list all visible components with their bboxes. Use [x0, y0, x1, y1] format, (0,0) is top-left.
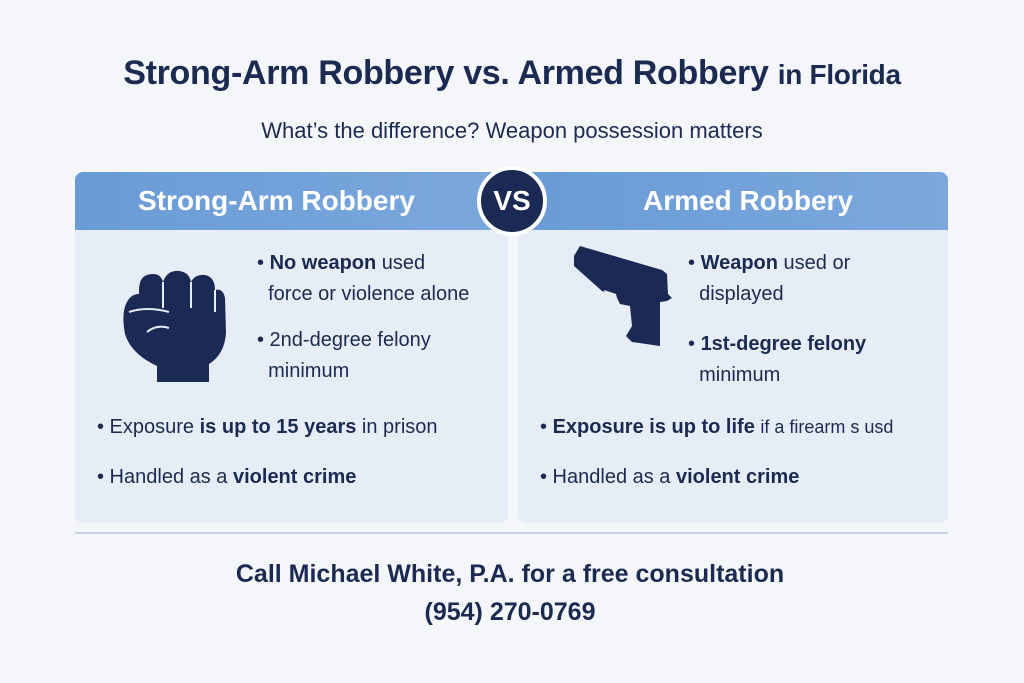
header: armed — [518, 172, 948, 230]
panel: armed: • 1st-degree felony — [688, 333, 866, 355]
panel: strong-arm: • Handled as a violent crime — [97, 466, 356, 488]
bullets: strong-arm: force or violence alone — [268, 283, 469, 305]
panel: strong-arm: • Exposure is up to 15 years in prison — [97, 416, 438, 438]
subtitle: What’s the difference? Weapon possession matters — [261, 118, 763, 143]
panel: strong-arm: • 2nd-degree felony — [257, 329, 431, 351]
panel: armed: • Exposure is up to life if a firearm s usd — [540, 416, 893, 438]
bullets: armed: • Weapon used or — [688, 252, 850, 274]
bullets: strong-arm: • No weapon used — [257, 252, 425, 274]
call to action — [236, 560, 784, 626]
bullets: armed: displayed — [699, 283, 784, 305]
icon: gun — [574, 246, 672, 346]
panel: strong-arm: minimum — [268, 360, 349, 382]
title: Strong-Arm Robbery vs. Armed Robbery in Florida — [123, 54, 901, 92]
panel: strong-arm — [75, 172, 508, 523]
panel: armed: minimum — [699, 364, 780, 386]
icon: fist — [123, 270, 226, 382]
header: armed: Armed Robbery — [643, 185, 853, 216]
vs badge: VS — [493, 185, 531, 216]
call to action: Call Michael White, P.A. for a free consultation — [236, 560, 784, 588]
vs badge — [477, 166, 547, 236]
header: strong-arm — [75, 172, 508, 230]
bullets: strong-arm — [257, 252, 469, 305]
call to action: (954) 270-0769 — [425, 598, 595, 626]
panel: armed — [518, 172, 948, 523]
panel: armed: • Handled as a violent crime — [540, 466, 799, 488]
header: strong-arm: Strong-Arm Robbery — [138, 185, 415, 216]
bullets: armed — [688, 252, 850, 305]
